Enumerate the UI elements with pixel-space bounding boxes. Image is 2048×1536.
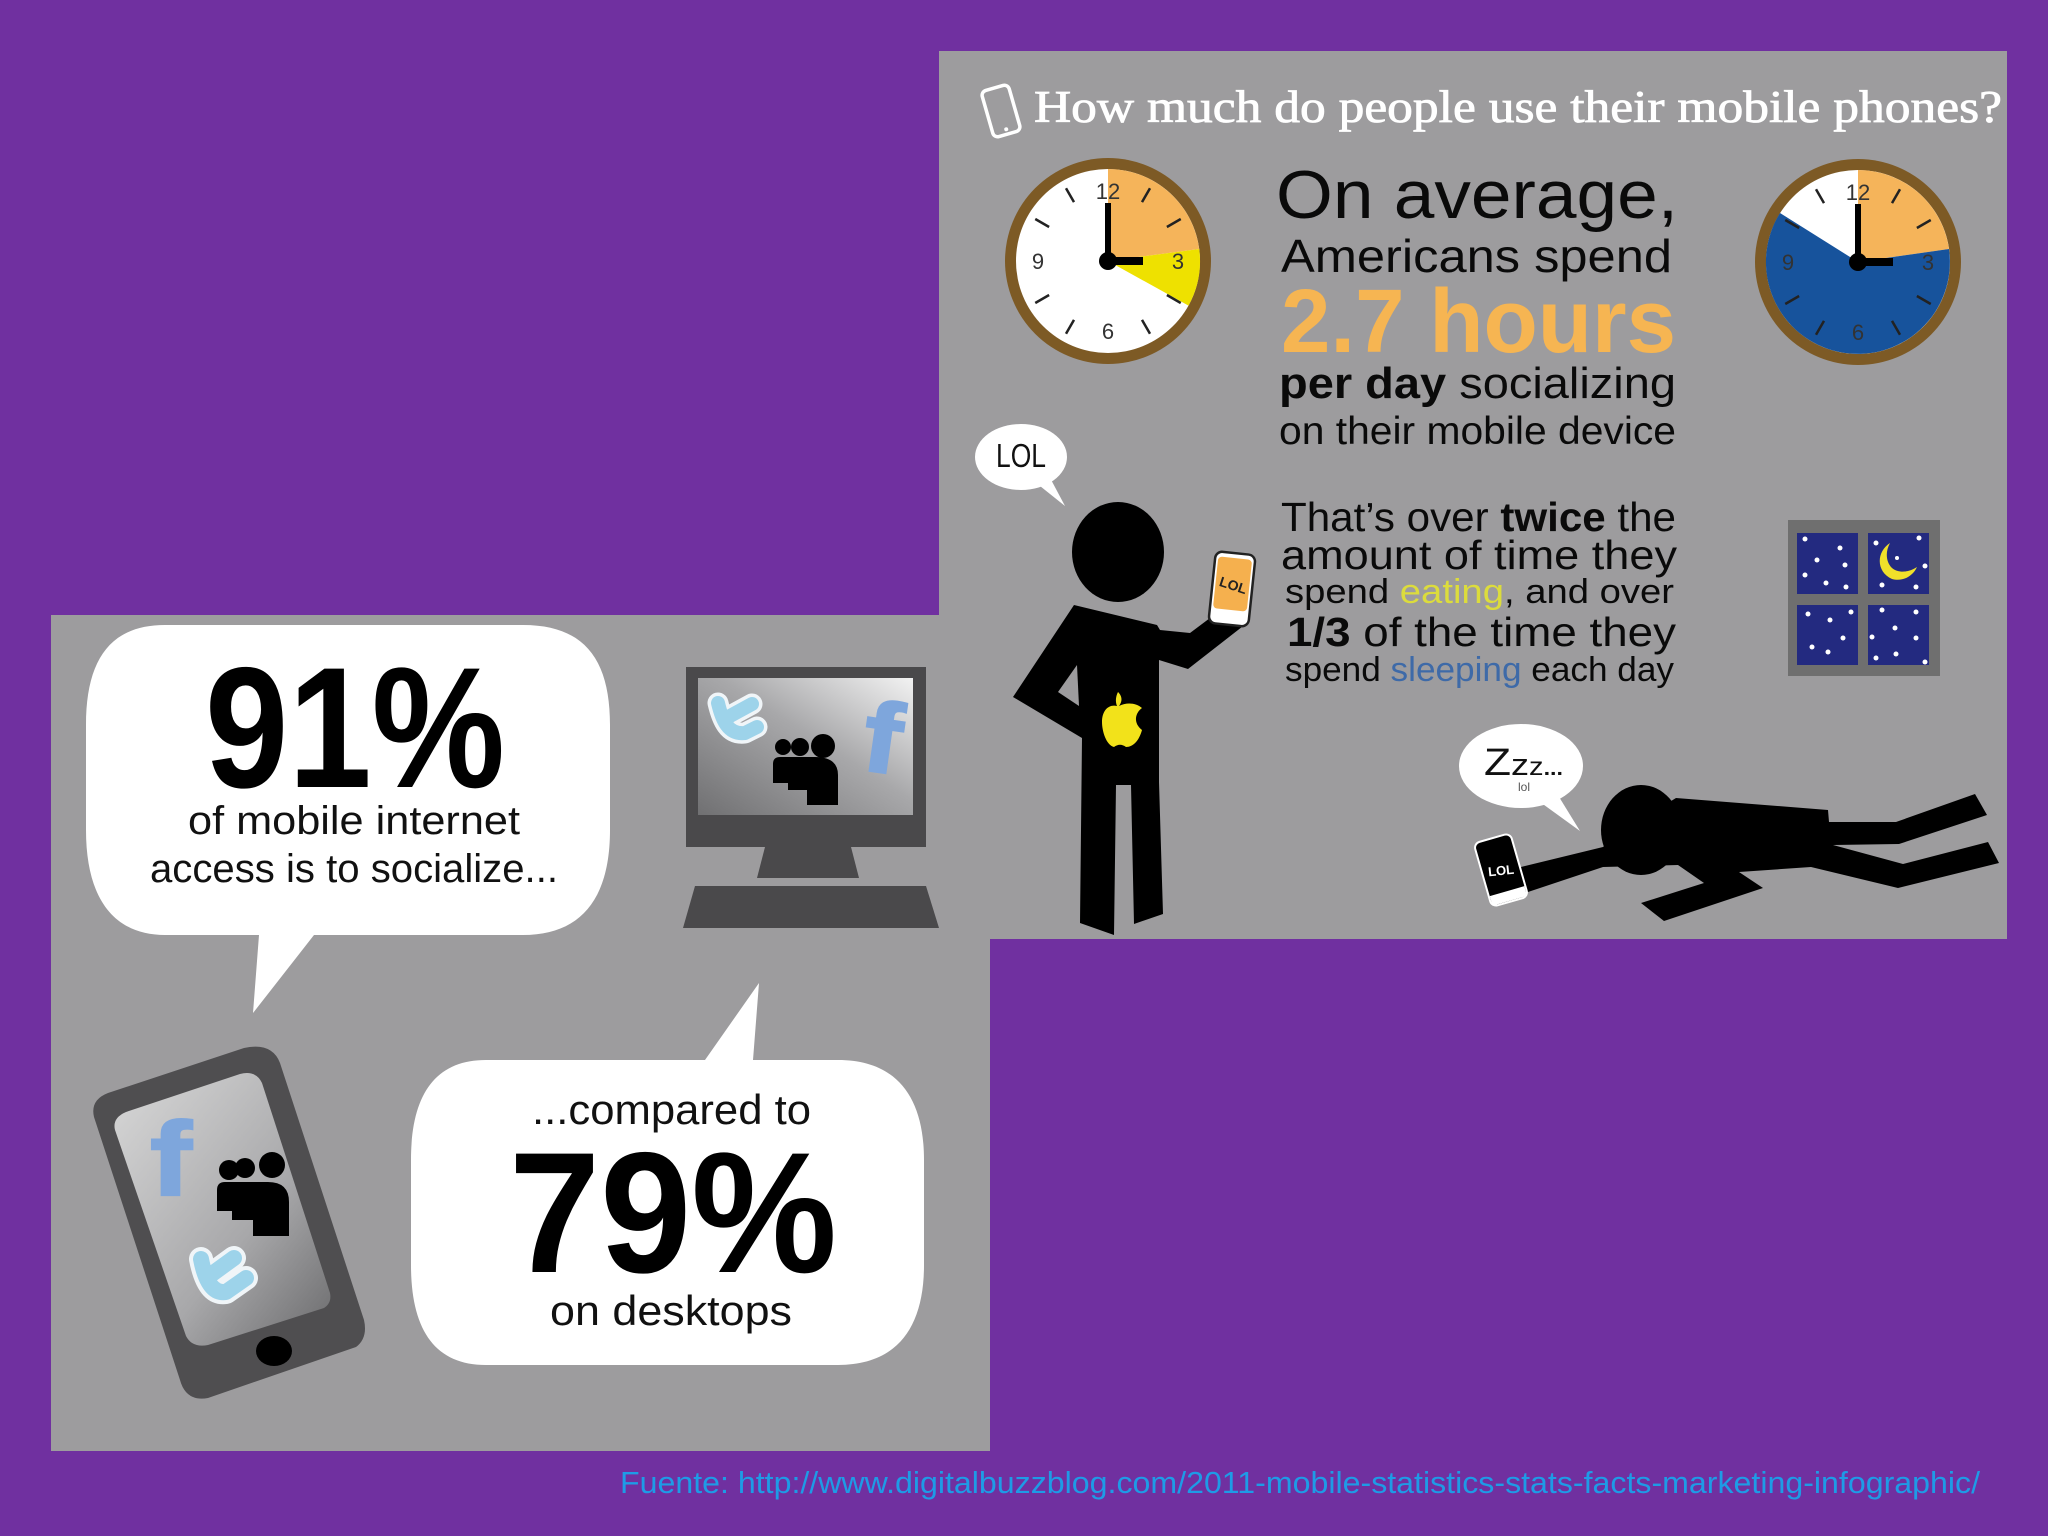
icon: figure lying down with phone: [1474, 785, 1999, 921]
callout: 91 percent bubble: 91%: [205, 632, 505, 824]
icon: phone on floor: [1474, 833, 1528, 907]
callout: 79 percent bubble: [411, 983, 924, 1365]
icon: phone outline: [981, 84, 1021, 138]
callout: 79 percent bubble: 79%: [509, 1117, 837, 1309]
chart: left clock: 6: [1102, 319, 1114, 344]
callout: LOL bubble: LOL: [996, 437, 1046, 474]
text block: average time: [1276, 157, 1678, 453]
callout: Zzz bubble: Zzz...: [1484, 742, 1563, 784]
text block: average time: per day socializing: [1279, 359, 1676, 408]
chart: right clock: 3: [1922, 250, 1934, 275]
text block: comparison: That’s over twice the: [1281, 494, 1676, 540]
source credit: Fuente: http://www.digitalbuzzblog.com/2011-mobile-statistics-stats-facts-marketing-infographic/: [620, 1465, 1980, 1500]
icon: facebook on desktop: f: [856, 679, 911, 796]
callout: 91 percent bubble: access is to socialize...: [150, 847, 558, 891]
text block: average time: On average,: [1276, 157, 1678, 233]
icon: phone on floor: LOL: [1487, 862, 1515, 879]
text block: comparison: 1/3 of the time they: [1287, 609, 1677, 655]
text block: comparison: spend eating , and over: [1285, 573, 1674, 611]
icon: people on phone: [217, 1152, 289, 1236]
icon: night window: [1788, 520, 1940, 676]
chart: left clock: [1005, 158, 1211, 364]
chart: left clock: 9: [1032, 249, 1044, 274]
callout: 79 percent bubble: ...compared to: [532, 1086, 811, 1133]
icon: yellow apple: [1102, 692, 1142, 747]
icon: standing figure with phone: [1013, 502, 1256, 935]
chart: right clock: [1755, 159, 1961, 365]
icon: smartphone: [93, 1047, 365, 1399]
callout: LOL bubble: [975, 424, 1067, 506]
panel: social access: [51, 615, 990, 1451]
callout: 91 percent bubble: of mobile internet: [188, 799, 520, 843]
text block: average time: 2.7 hours: [1281, 272, 1676, 372]
callout: 79 percent bubble: on desktops: [550, 1287, 792, 1334]
chart: right clock: 9: [1782, 250, 1794, 275]
chart: right clock: 12: [1846, 180, 1870, 205]
icon: desktop computer: [683, 667, 939, 928]
icon: facebook on phone: f: [150, 1100, 192, 1218]
text block: average time: on their mobile device: [1279, 410, 1676, 453]
icon: twitter on phone: [201, 1258, 246, 1292]
chart: left clock: 12: [1096, 179, 1120, 204]
icon: people on desktop: [773, 734, 838, 805]
icon: held phone: LOL: [1217, 573, 1249, 597]
title: How much do people use their mobile phones?: [1034, 82, 2002, 132]
icon: held phone: [1208, 551, 1256, 627]
chart: left clock: 3: [1172, 249, 1184, 274]
icon: twitter on desktop: [718, 703, 757, 733]
text block: comparison: spend sleeping each day: [1285, 651, 1674, 689]
panel: mobile phone usage: [939, 51, 2007, 939]
text block: comparison: amount of time they: [1281, 532, 1678, 578]
callout: 91 percent bubble: [86, 625, 610, 1013]
text block: average time: Americans spend: [1281, 230, 1672, 282]
text block: comparison: [1281, 494, 1678, 689]
chart: right clock: 6: [1852, 320, 1864, 345]
callout: Zzz bubble: lol: [1518, 780, 1530, 794]
callout: Zzz bubble: [1459, 724, 1583, 831]
